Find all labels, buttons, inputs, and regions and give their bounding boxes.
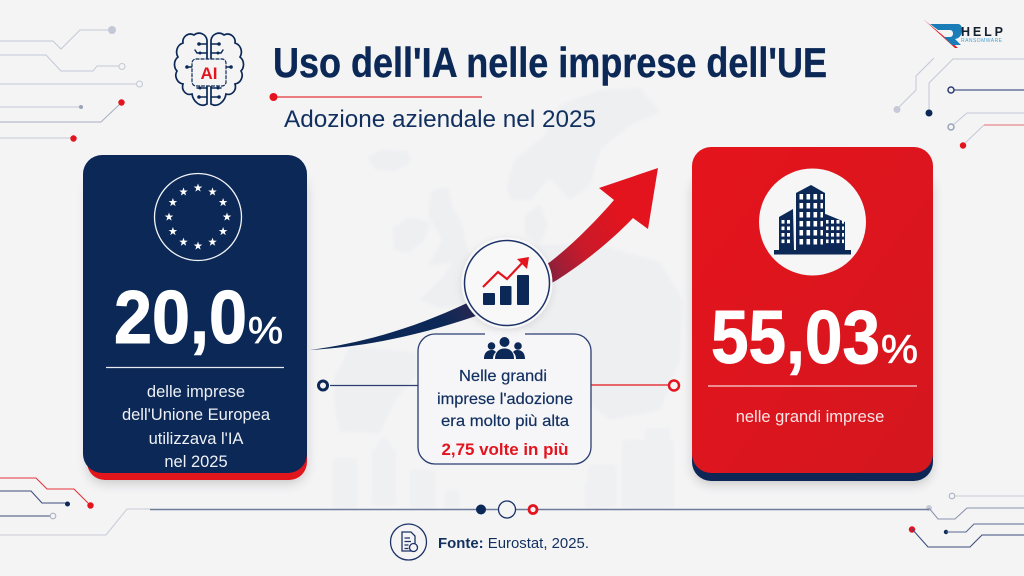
circuit lines: top right [894, 58, 1024, 149]
callout highlight: 2,75 volte in più [442, 441, 568, 459]
icon: people [484, 337, 525, 359]
EU description: utilizzava l'IA [149, 430, 243, 448]
connector: left [318, 381, 418, 390]
EU description [122, 383, 271, 471]
callout: comparison box [418, 331, 591, 464]
logo: Help Ransomware: RANSOMWARE [961, 38, 1003, 44]
panel: large enterprises statistic [692, 147, 933, 481]
title underline [270, 93, 482, 101]
EU percentage value: 20,0 [114, 275, 247, 359]
logo: Help Ransomware: HELP [961, 25, 1003, 39]
large enterprises percentage value: 55,03 [711, 295, 880, 379]
title: Uso dell'IA nelle imprese dell'UE [273, 39, 827, 86]
callout text [437, 368, 573, 430]
connector: right [591, 380, 679, 390]
arrow: growth curve [310, 168, 658, 350]
circuit lines: top left [0, 26, 142, 142]
callout text: era molto più alta [441, 413, 569, 430]
subtitle: Adozione aziendale nel 2025 [284, 106, 596, 133]
icon: rising chart badge [462, 238, 552, 328]
icon: source document [390, 524, 426, 560]
EU percentage value: % [248, 310, 283, 352]
callout text: Nelle grandi [459, 368, 547, 385]
icon: EU stars circle [154, 174, 242, 260]
callout text: imprese l'adozione [437, 391, 573, 408]
footer timeline [150, 501, 929, 518]
circuit lines: bottom right [909, 493, 1024, 547]
circuit lines: bottom left [0, 478, 150, 535]
EU description: dell'Unione Europea [122, 406, 271, 424]
large enterprises description: nelle grandi imprese [736, 408, 884, 426]
EU description: nel 2025 [164, 453, 228, 471]
icon: AI brain [174, 33, 244, 105]
large enterprises percentage value: % [881, 328, 918, 372]
source text: Fonte: Eurostat, 2025. [438, 535, 589, 552]
EU description: delle imprese [147, 383, 245, 401]
faint map of Europe [333, 88, 683, 433]
AI label: AI [200, 64, 218, 83]
panel: EU statistic [83, 155, 307, 480]
logo: Help Ransomware [923, 19, 1003, 48]
faint city skyline [333, 428, 674, 508]
icon: office buildings [759, 168, 866, 276]
